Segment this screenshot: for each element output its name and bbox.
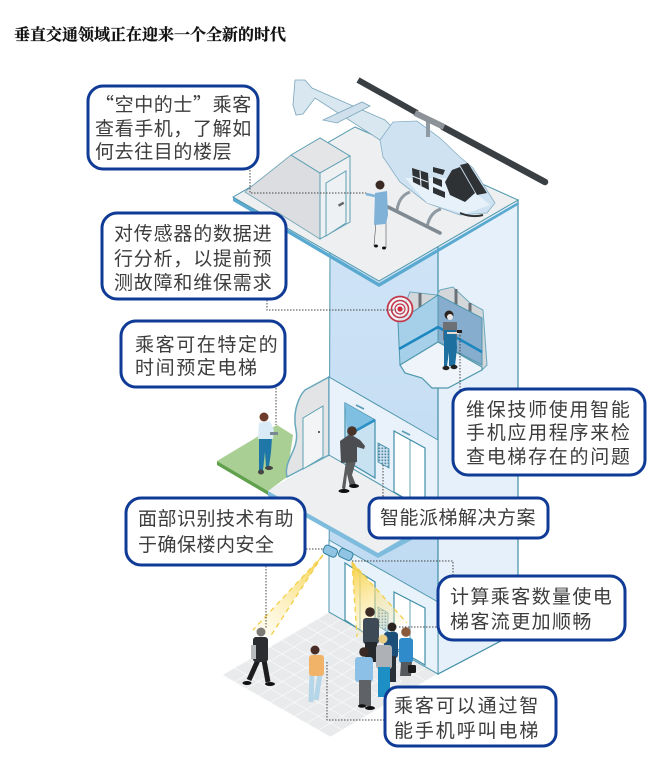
callout: sensor data <box>102 213 286 299</box>
roof slab <box>233 127 518 287</box>
callout: passenger count: 梯客流更加顺畅 <box>450 611 593 633</box>
callout: passenger count <box>438 576 625 640</box>
people queue <box>355 607 416 710</box>
callout: scheduled booking <box>121 321 285 387</box>
callout: phone call elevator <box>385 687 556 746</box>
callout: passenger count: 计算乘客数量使电 <box>450 586 613 608</box>
sensor target icon <box>387 296 413 322</box>
callout: face recognition: 面部识别技术有助 <box>138 508 294 530</box>
title: 垂直交通领域正在迎来一个全新的时代 <box>14 25 286 44</box>
callout: scheduled booking: 乘客可在特定的 <box>135 334 279 356</box>
callout: technician app <box>453 389 645 475</box>
callout: phone call elevator: 能手机呼叫电梯 <box>394 720 540 742</box>
callout: smart dispatch <box>369 498 548 538</box>
callout: scheduled booking: 时间预定电梯 <box>135 357 259 379</box>
person: walking man <box>242 628 275 686</box>
lobby tiled floor <box>222 612 438 737</box>
lobby wall <box>329 540 438 674</box>
callout: phone call elevator: 乘客可以通过智 <box>394 695 540 717</box>
roof machine room <box>245 138 350 239</box>
person: woman in orange <box>309 646 329 702</box>
callout: sensor data: 测故障和维保需求 <box>114 272 272 294</box>
dotted leader lines <box>250 170 460 720</box>
callout: sensor data: 行分析，以提前预 <box>114 248 272 270</box>
callout: sensor data: 对传感器的数据进 <box>114 223 272 245</box>
callout: air taxi: “空中的士”乘客 <box>95 90 252 117</box>
helicopter <box>293 80 545 233</box>
middle floor slab <box>268 455 438 558</box>
callout: technician app: 手机应用程序来检 <box>466 422 632 444</box>
building illustration <box>217 80 545 737</box>
callout: technician app: 查电梯存在的问题 <box>466 446 632 468</box>
middle floor elevator wall <box>329 377 438 518</box>
camera light beams <box>253 555 407 637</box>
security cameras <box>322 544 354 561</box>
callout: face recognition <box>126 498 305 565</box>
callout: technician app: 维保技师使用智能 <box>466 399 632 421</box>
elevator shaft front face <box>329 240 438 674</box>
callout: smart dispatch: 智能派梯解决方案 <box>380 507 536 529</box>
middle floor grey wall with door <box>286 377 329 477</box>
person: woman on terrace <box>258 412 278 474</box>
elevator cabin cutaway <box>398 287 487 388</box>
person: woman with phone on roof <box>366 180 388 250</box>
callout: face recognition: 于确保楼内安全 <box>138 534 275 556</box>
middle floor: green terrace <box>217 425 293 495</box>
callout: air taxi: 何去往目的楼层 <box>95 141 232 163</box>
person: man on phone at elevator <box>338 426 365 493</box>
callout: air taxi: 查看手机，了解如 <box>95 118 252 140</box>
shaft side face <box>438 200 518 674</box>
person: maintenance technician <box>442 310 462 370</box>
callout: air taxi <box>88 86 258 169</box>
